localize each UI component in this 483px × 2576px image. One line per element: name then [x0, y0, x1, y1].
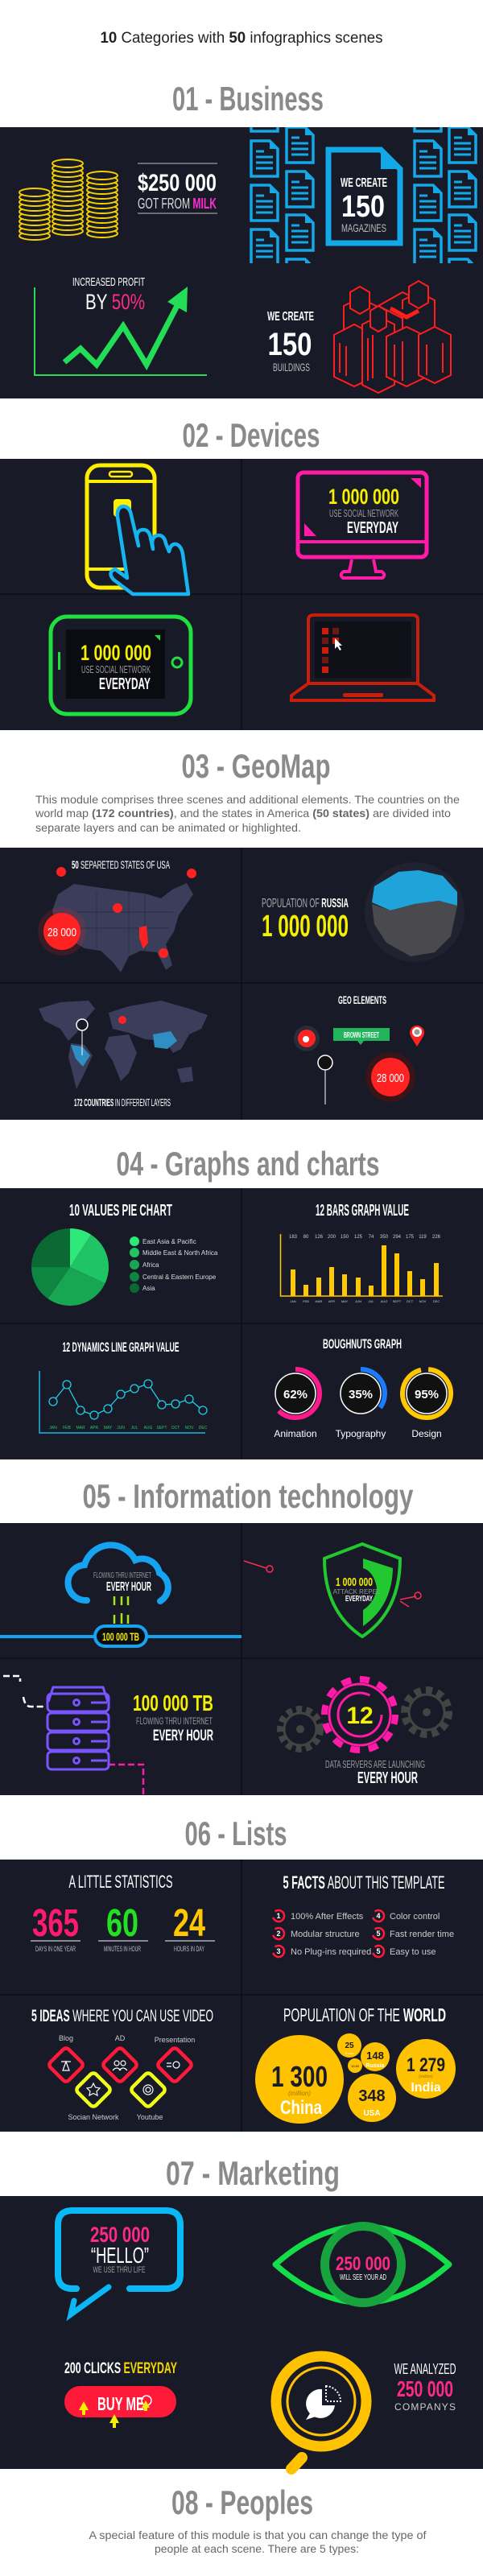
chart: doughnuts: 95% — [415, 1388, 439, 1402]
heading: 03 GeoMap: 03 - GeoMap — [182, 747, 330, 785]
chart: world population bubbles: (million) — [419, 2074, 433, 2079]
chart: line graph: FEB — [63, 1426, 72, 1430]
heading: 02 Devices: 02 - Devices — [182, 416, 320, 454]
chart: bars: MAR — [316, 1299, 323, 1303]
list: 5 facts: 2 — [276, 1930, 281, 1938]
callout: hello speech bubble: WE USE THRU LIFE — [93, 2265, 145, 2275]
diagram: 5 ideas: Presentation — [155, 2036, 195, 2044]
chart: bars: JUL — [368, 1299, 374, 1303]
chart: pie: Asia — [142, 1285, 155, 1292]
icon: monitor: 1 000 000 — [328, 485, 399, 509]
text block: peoples description: A special feature of this module is that you can change the type of — [89, 2529, 427, 2541]
chart: line graph: OCT — [171, 1426, 180, 1430]
chart: doughnuts — [271, 1336, 452, 1439]
icon: shield — [244, 1544, 421, 1637]
chart: world population bubbles: USA — [363, 2109, 381, 2118]
diagram: 5 ideas: 5 IDEAS WHERE YOU CAN USE VIDEO — [31, 2007, 213, 2025]
panel: business — [0, 127, 483, 398]
chart: bars: FEB — [303, 1299, 309, 1303]
chart: world population bubbles: (million) — [288, 2090, 311, 2097]
chart: pie: Middle East & North Africa — [142, 1249, 218, 1257]
chart: world population bubbles: 148 — [366, 2050, 384, 2062]
list: 5 facts: Modular structure — [291, 1930, 360, 1939]
chart: bars: 175 — [406, 1235, 415, 1240]
list: 5 facts: 5 — [376, 1947, 381, 1955]
map: russia globe: POPULATION OF RUSSIA — [262, 897, 349, 910]
chart: world population bubbles: China — [280, 2097, 323, 2119]
icon: monitor: USE SOCIAL NETWORK — [329, 507, 398, 519]
chart: bars: 350 — [380, 1235, 389, 1240]
callout: hello speech bubble: “HELLO” — [91, 2243, 149, 2268]
text: 150 buildings: BUILDINGS — [273, 361, 310, 374]
map: russia globe — [262, 862, 464, 962]
geo elements: 28 000 — [377, 1071, 404, 1085]
chart: world population bubbles: 1 279 — [407, 2054, 445, 2076]
icon: monitor — [298, 473, 427, 578]
text block: geomap description: separate layers and can be animated or highlighted. — [35, 821, 301, 834]
chart: world population bubbles: Korea — [345, 2051, 354, 2055]
icon: cloud: FLOWING THRU INTERNET — [93, 1571, 151, 1580]
icon: coin stacks — [19, 159, 118, 240]
icon: cloud — [0, 1545, 242, 1646]
icon: gears: EVERY HOUR — [357, 1769, 418, 1787]
chart: world population bubbles: 10.80 — [351, 2064, 360, 2068]
callout: hello speech bubble — [58, 2211, 180, 2314]
icon: magazines grid — [250, 127, 477, 263]
chart: line graph: MAY — [104, 1426, 113, 1430]
text: analyzed companies: 250 000 — [397, 2376, 453, 2401]
chart: bars: 294 — [393, 1235, 402, 1240]
text: 250000 milk — [138, 163, 217, 213]
icon: server — [3, 1676, 213, 1795]
chart: line graph: MAR — [76, 1426, 85, 1430]
chart: profit line — [35, 275, 207, 375]
chart: line graph: DEC — [199, 1426, 208, 1430]
icon: gears: 12 — [346, 1703, 374, 1729]
chart: line graph: APR — [90, 1426, 99, 1430]
diagram: 5 ideas: AD — [115, 2034, 126, 2042]
chart: bars: APR — [328, 1299, 335, 1303]
icon: tablet — [51, 617, 191, 714]
list: 5 facts: No Plug-ins required — [291, 1947, 371, 1957]
stats: little statistics: MINUTES IN HOUR — [104, 1945, 141, 1953]
chart: line graph: NOV — [185, 1426, 194, 1430]
heading: 01 Business: 01 - Business — [172, 80, 324, 118]
callout: 150 magazines: WE CREATE — [341, 176, 387, 190]
chart: world population bubbles — [255, 2004, 456, 2124]
chart: profit line: INCREASED PROFIT — [72, 275, 145, 289]
chart: line graph: JUL — [131, 1426, 138, 1430]
chart: bars: 150 — [341, 1235, 349, 1240]
icon: eye: WILL SEE YOUR AD — [340, 2273, 386, 2282]
chart: line graph: 12 DYNAMICS LINE GRAPH VALUE — [63, 1340, 179, 1355]
diagram: 5 ideas — [31, 2007, 213, 2121]
icon: tablet: USE SOCIAL NETWORK — [81, 663, 151, 675]
chart: doughnuts: 35% — [349, 1388, 373, 1402]
chart: pie: Central & Eastern Europe — [142, 1274, 217, 1281]
icon: gears — [281, 1679, 448, 1787]
stats: little statistics: HOURS IN DAY — [174, 1945, 204, 1953]
list: 5 facts: 4 — [376, 1912, 381, 1920]
icon: tablet: 1 000 000 — [80, 641, 151, 665]
text block: geomap description: This module comprises three scenes and additional elements. The countries on the — [35, 793, 460, 806]
map: usa states: 50 SEPARETED STATES OF USA — [72, 858, 170, 871]
text: analyzed companies — [394, 2361, 456, 2413]
list: 5 facts: 5 — [376, 1930, 381, 1938]
chart: bars: 126 — [315, 1235, 324, 1240]
icon: laptop — [291, 615, 434, 700]
list: 5 facts: 100% After Effects — [291, 1912, 364, 1922]
list: 5 facts — [273, 1872, 454, 1957]
list: 5 facts: Easy to use — [390, 1947, 436, 1957]
panel: graphs — [0, 1188, 483, 1459]
chart: line graph: AUG — [144, 1426, 153, 1430]
chart: world population bubbles: POPULATION OF THE WORLD — [283, 2004, 446, 2025]
callout: hello speech bubble: 250 000 — [90, 2223, 150, 2247]
icon: magnifier — [276, 2356, 366, 2469]
chart: doughnuts: Design — [411, 1428, 442, 1439]
stats: little statistics — [31, 1872, 215, 1953]
callout: 150 magazines — [328, 150, 400, 243]
chart: bars: OCT — [407, 1299, 414, 1303]
chart: bars: 119 — [419, 1235, 427, 1240]
text block: peoples description: people at each scene. There are 5 types: — [155, 2542, 359, 2555]
icon: cloud: 100 000 TB — [102, 1630, 139, 1643]
text: 150 buildings — [267, 310, 314, 374]
heading: 06 Lists: 06 - Lists — [185, 1814, 287, 1852]
chart: bars: DEC — [433, 1299, 440, 1303]
icon: eye: 250 000 — [336, 2253, 390, 2275]
chart: profit line: BY 50% — [85, 290, 145, 314]
map: world: 172 COUNTRIES IN DIFFERENT LAYERS — [74, 1096, 171, 1108]
geo elements — [294, 993, 424, 1104]
icon: shield: 1 000 000 — [336, 1575, 373, 1589]
chart: bars — [280, 1202, 443, 1303]
icon: server: 100 000 TB — [133, 1690, 213, 1715]
chart: bars: 200 — [328, 1235, 336, 1240]
list: 5 facts: Color control — [390, 1912, 440, 1922]
chart: bars: NOV — [419, 1299, 427, 1303]
panel: devices — [0, 459, 483, 730]
chart: bars: SEPT — [393, 1299, 402, 1303]
icon: monitor: EVERYDAY — [347, 519, 398, 537]
chart: pie: Africa — [142, 1261, 159, 1269]
chart: world population bubbles: 25 — [345, 2041, 354, 2050]
panel: information technology — [0, 1523, 483, 1795]
chart: doughnuts: BOUGHNUTS GRAPH — [323, 1336, 402, 1352]
chart: world population bubbles: Russia — [366, 2063, 385, 2069]
list: 5 facts: 1 — [276, 1912, 281, 1920]
map: russia globe: 1 000 000 — [262, 910, 349, 943]
heading: 07 Marketing: 07 - Marketing — [166, 2154, 340, 2192]
chart: pie: 10 VALUES PIE CHART — [69, 1202, 172, 1220]
map: usa states: 28 000 — [47, 926, 76, 939]
callout: 150 magazines: MAGAZINES — [341, 221, 386, 234]
icon: eye — [275, 2222, 449, 2307]
heading: 04 Graphs and charts: 04 - Graphs and charts — [116, 1145, 380, 1183]
text: 150 buildings: WE CREATE — [267, 310, 314, 324]
chart: world population bubbles: 1 300 — [271, 2060, 328, 2093]
text: analyzed companies: COMPANYS — [394, 2401, 456, 2413]
text block: peoples description — [89, 2529, 427, 2555]
stats: little statistics: 24 — [173, 1902, 205, 1945]
text block: geomap description — [35, 793, 460, 834]
list: 5 facts: Fast render time — [390, 1930, 454, 1939]
chart: line graph — [39, 1340, 208, 1433]
chart: bars: AUG — [381, 1299, 387, 1303]
title: 10 Categories with 50 infographics scenes — [100, 30, 383, 47]
map: world — [39, 1001, 208, 1108]
stats: little statistics: DAYS IN ONE YEAR — [35, 1945, 76, 1953]
chart: bars: JAN — [290, 1299, 296, 1303]
icon: server: EVERY HOUR — [153, 1728, 213, 1744]
chart: bars: MAY — [341, 1299, 349, 1303]
callout: buy me button: BUY ME — [97, 2393, 144, 2414]
chart: bars: 226 — [432, 1235, 441, 1240]
chart: bars: JUN — [355, 1299, 361, 1303]
stats: little statistics: 60 — [106, 1902, 138, 1945]
text: 250000 milk: $250 000 — [138, 170, 217, 196]
chart: pie — [31, 1202, 218, 1306]
panel: geomap — [0, 848, 483, 1120]
callout: buy me button: 200 CLICKS EVERYDAY — [64, 2360, 177, 2377]
chart: world population bubbles: India — [411, 2081, 441, 2095]
chart: bars: 74 — [369, 1235, 374, 1240]
diagram: 5 ideas: Blog — [59, 2034, 73, 2042]
list: 5 facts: 3 — [276, 1947, 281, 1955]
panel: lists — [0, 1860, 483, 2132]
chart: line graph: JUN — [117, 1426, 125, 1430]
chart: world population bubbles: 348 — [358, 2087, 386, 2105]
map: usa states — [38, 858, 196, 972]
chart: doughnuts: Animation — [274, 1428, 317, 1439]
chart: bars: 125 — [354, 1235, 363, 1240]
diagram: 5 ideas: Socian Network — [68, 2113, 119, 2121]
icon: shield: ATTACK REPEL — [333, 1588, 381, 1596]
icon: phone with hand — [87, 465, 188, 594]
text block: geomap description: world map (172 countries), and the states in America (50 states) are divided into — [35, 807, 451, 819]
stats: little statistics: A LITTLE STATISTICS — [69, 1872, 172, 1892]
stats: little statistics: 365 — [32, 1902, 79, 1945]
panel: marketing — [0, 2196, 483, 2469]
chart: doughnuts: Typography — [336, 1428, 386, 1439]
heading: 08 Peoples: 08 - Peoples — [171, 2483, 313, 2521]
chart: pie: East Asia & Pacific — [142, 1238, 196, 1245]
chart: line graph: SEPT — [156, 1426, 167, 1430]
callout: buy me button — [64, 2360, 177, 2428]
geo elements: BROWN STREET — [344, 1031, 379, 1040]
geo elements: GEO ELEMENTS — [338, 993, 386, 1006]
icon: server: FLOWING THRU INTERNET — [136, 1715, 213, 1727]
icon: buildings — [334, 281, 451, 393]
icon: tablet: EVERYDAY — [99, 675, 151, 693]
callout: 150 magazines: 150 — [341, 190, 385, 224]
text: 250000 milk: GOT FROM MILK — [138, 196, 217, 212]
text: 150 buildings: 150 — [267, 327, 312, 362]
chart: bars: 80 — [303, 1235, 309, 1240]
icon: cloud: EVERY HOUR — [106, 1580, 151, 1594]
chart: line graph: JAN — [49, 1426, 57, 1430]
diagram: 5 ideas: Youtube — [137, 2113, 163, 2121]
chart: bars: 183 — [289, 1235, 298, 1240]
chart: doughnuts: 62% — [283, 1388, 308, 1402]
icon: shield: EVERYDAY — [345, 1595, 373, 1604]
